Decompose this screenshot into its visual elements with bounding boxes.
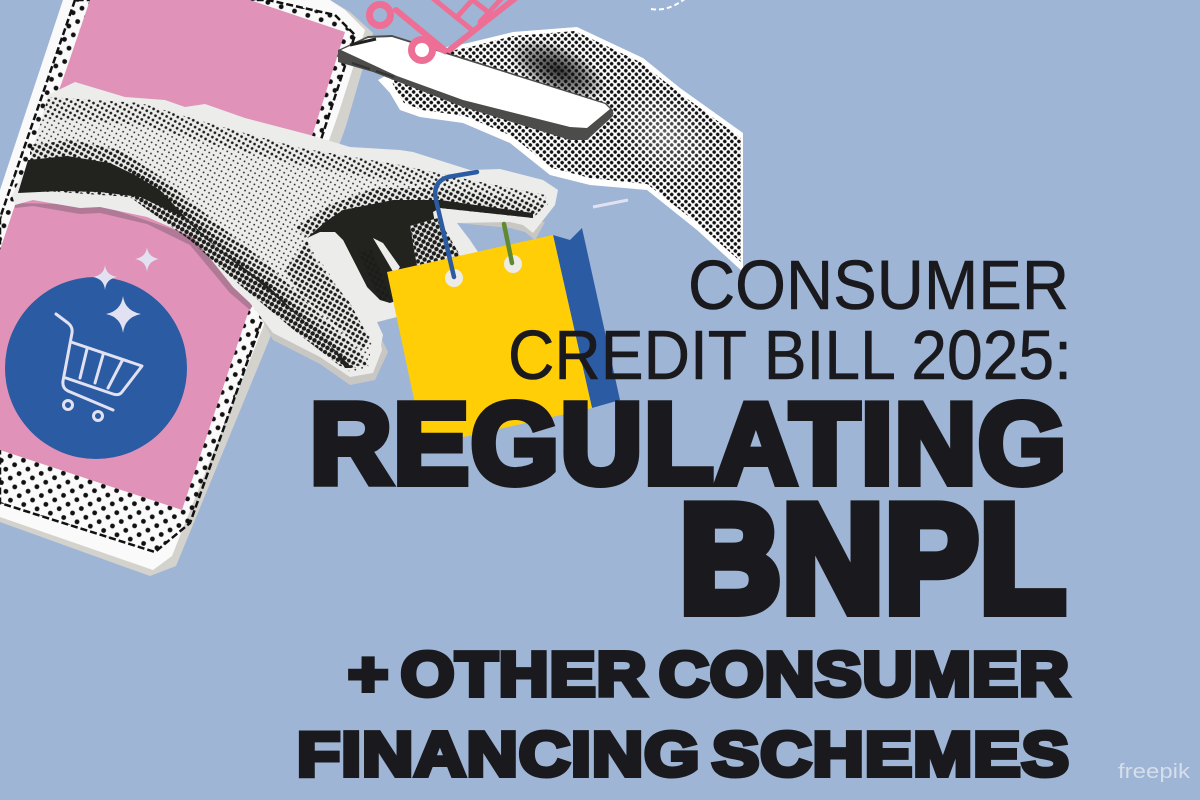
dense halftone shading	[30, 140, 545, 366]
paper shadows	[15, 203, 256, 310]
icon: shopping cart	[56, 314, 142, 420]
reaching hand on torn paper	[12, 82, 558, 385]
shopping cart badge	[5, 277, 187, 459]
bag front	[387, 235, 592, 446]
phone screen	[0, 0, 345, 510]
upper halftone edge	[42, 97, 548, 205]
black shadow: palm and fingers	[307, 200, 533, 303]
torn paper	[12, 82, 558, 377]
right hand halftone	[378, 26, 743, 272]
green handle	[504, 224, 512, 263]
bag side	[553, 228, 620, 408]
front lens notch	[350, 39, 376, 45]
finger highlight	[307, 232, 385, 350]
shopping bag	[387, 172, 620, 446]
pink cart wheel	[412, 40, 447, 60]
title line: regulating: REGULATING	[310, 381, 1068, 508]
phone body	[338, 35, 613, 140]
dashed arc decoration	[651, 0, 686, 10]
watermark: freepik	[1118, 761, 1191, 783]
title line: bnpl: BNPL	[680, 474, 1067, 644]
black shadow: wrist and forearm	[18, 156, 352, 368]
title line: other consumer: + OTHER CONSUMER	[348, 640, 1070, 710]
pink shopping cart	[370, 0, 518, 52]
bag holes	[445, 269, 463, 287]
phone screen	[341, 37, 610, 128]
halftone skin	[18, 97, 548, 372]
hand-held smartphone	[338, 35, 613, 140]
smartphone illustration	[0, 0, 373, 576]
title line: credit bill: CREDIT BILL 2025:	[508, 316, 1072, 394]
title	[297, 246, 1072, 790]
title line: consumer: CONSUMER	[688, 246, 1069, 324]
decorative dash	[593, 200, 628, 207]
darkest halftone along shadow	[130, 168, 356, 368]
title line: financing schemes: FINANCING SCHEMES	[297, 720, 1070, 790]
side buttons	[352, 63, 394, 77]
icon: sparkles	[93, 247, 159, 333]
blue handle	[435, 172, 477, 277]
finger halftone patches	[358, 250, 392, 300]
